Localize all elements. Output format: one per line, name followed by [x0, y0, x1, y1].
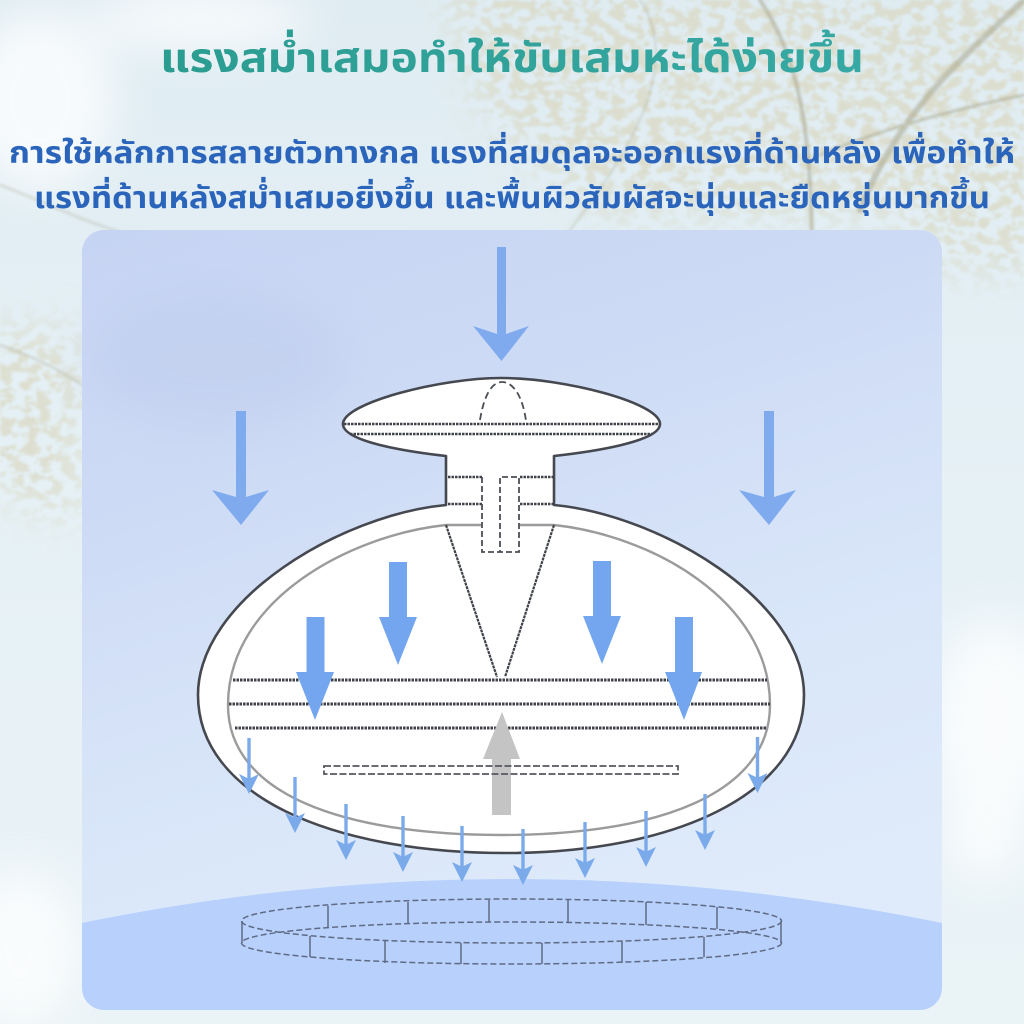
arrow: top pressure — [473, 247, 529, 361]
description text — [9, 131, 1015, 216]
illustration: massager cross-section — [198, 378, 804, 853]
arrow: right pressure — [739, 411, 796, 525]
skin contact ring — [242, 899, 782, 964]
description text: การใช้หลักการสลายตัวทางกล แรงที่สมดุลจะออกแรงที่ด้านหลัง เพื่อทำให้ — [9, 131, 1015, 171]
horizontal seams — [229, 680, 770, 728]
cone seams — [446, 525, 554, 677]
inner shell line — [228, 525, 770, 835]
panel: diagram background — [82, 230, 942, 1010]
background: tree foliage — [0, 0, 1024, 520]
title: แรงสม่ำเสมอทำให้ขับเสมหะได้ง่ายขึ้น — [160, 29, 864, 81]
handle seams — [344, 424, 658, 504]
small output arrows — [239, 737, 768, 885]
description text: แรงที่ด้านหลังสม่ำเสมอยิ่งขึ้น และพื้นผิวสัมผัสจะนุ่มและยืดหยุ่นมากขึ้น — [34, 176, 990, 216]
ground surface — [82, 879, 942, 1010]
inner dashed bar — [324, 766, 678, 774]
inner force arrows — [296, 561, 702, 720]
arrow: left pressure — [212, 411, 269, 525]
arrow: counter force grey — [483, 712, 520, 815]
dome dashed — [480, 382, 526, 421]
massager body outline — [198, 378, 804, 853]
connector slot dashed — [482, 477, 519, 552]
